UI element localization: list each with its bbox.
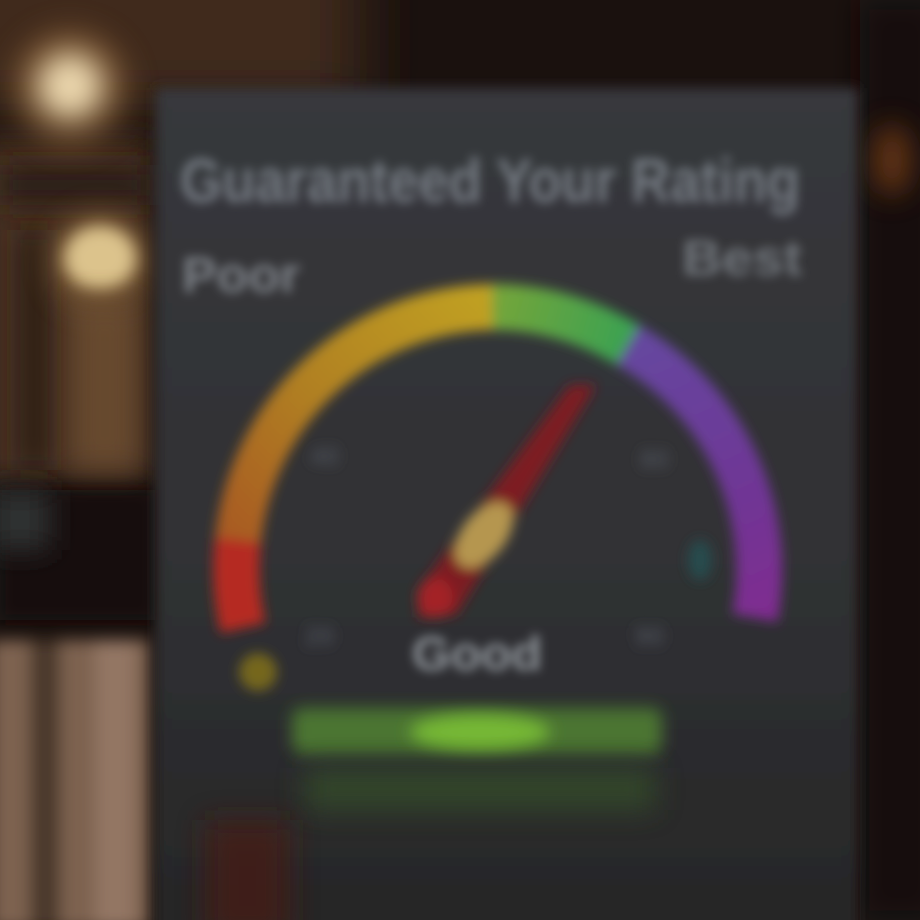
caption under bar: [305, 768, 655, 810]
icon: ceiling light top: [10, 28, 130, 148]
label: left: Poor: [182, 247, 300, 303]
chart: gauge arc: [236, 307, 759, 628]
arc segment: green: [492, 307, 628, 345]
arc segment: red: [236, 540, 243, 628]
panel: gauge board: [156, 88, 858, 920]
gauge tick labels: [305, 441, 669, 651]
arc segment: orange to yellow: [238, 307, 495, 540]
gauge tick labels: 20: [305, 621, 334, 651]
icon: teal tick mark: [688, 540, 712, 580]
title: Guaranteed Your Rating: [180, 147, 800, 216]
floor reflections: [0, 640, 150, 920]
label: right: Best: [682, 230, 802, 286]
gauge tick labels: 40: [310, 441, 339, 471]
icon: wall light lower: [50, 212, 150, 470]
icon: small yellow marker: [239, 653, 277, 691]
icon: orange glow right: [872, 124, 912, 196]
needle: [417, 385, 596, 618]
score value: Good: [412, 628, 542, 681]
gauge tick labels: 90: [635, 621, 664, 651]
gauge tick labels: 80: [640, 444, 669, 474]
arc segment: purple: [628, 345, 759, 618]
dark red blur at bottom: [205, 820, 290, 920]
status bar: green: [292, 708, 662, 754]
